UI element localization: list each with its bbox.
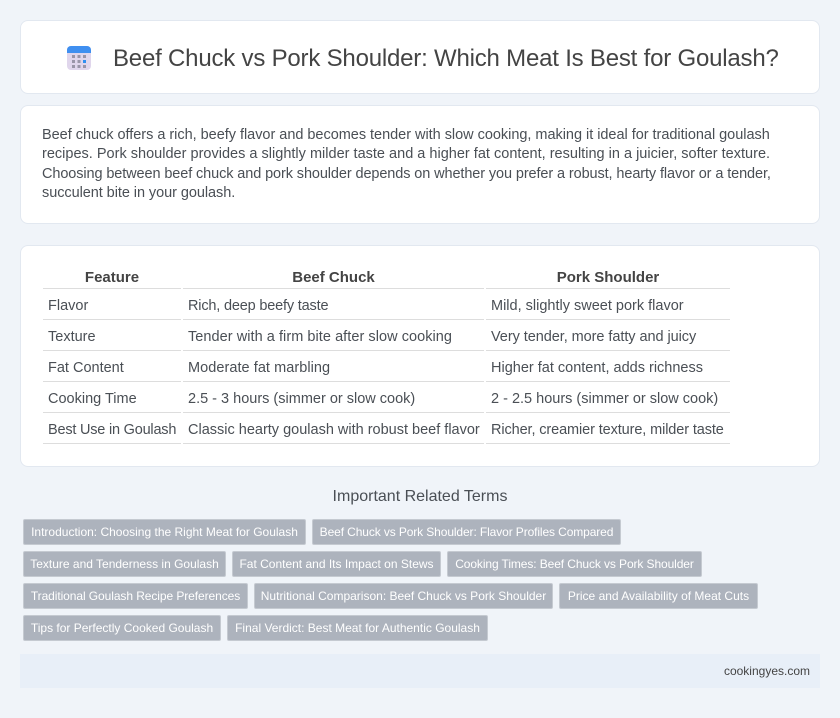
row: flavor: Mild, slightly sweet pork flavor (491, 298, 684, 314)
table header (85, 269, 659, 286)
related term tags: Introduction: Choosing the Right Meat for Goulash (31, 525, 298, 539)
row: cooking time (48, 391, 718, 407)
related term tags: Cooking Times: Beef Chuck vs Pork Shoulder (455, 557, 694, 571)
row: flavor: Flavor (48, 298, 88, 314)
row: cooking time: 2.5 - 3 hours (simmer or slow cook) (188, 391, 415, 407)
related term tags: Tips for Perfectly Cooked Goulash (31, 621, 213, 635)
heading: related terms: Important Related Terms (333, 488, 507, 505)
row: fat content: Fat Content (48, 360, 124, 376)
row: best use in goulash: Best Use in Goulash (48, 422, 176, 438)
intro card (20, 105, 820, 224)
related term tags: Traditional Goulash Recipe Preferences (31, 589, 240, 603)
icon: calendar (67, 46, 91, 70)
related term tags: Texture and Tenderness in Goulash (30, 557, 219, 571)
row: fat content (48, 360, 703, 376)
row: texture: Texture (48, 329, 96, 345)
comparison table card (20, 245, 820, 467)
title text: Beef Chuck vs Pork Shoulder: Which Meat Is Best for Goulash? (113, 45, 779, 72)
row: cooking time: Cooking Time (48, 391, 137, 407)
table header: Pork Shoulder (557, 269, 659, 286)
intro paragraph: recipes. Pork shoulder provides a slightly milder taste and a higher fat content, resulting in a juicier, softer texture. (42, 146, 770, 162)
row: best use in goulash: Classic hearty goulash with robust beef flavor (188, 422, 480, 438)
row: flavor: Rich, deep beefy taste (188, 298, 328, 314)
row: best use in goulash (48, 422, 724, 438)
intro paragraph: Choosing between beef chuck and pork shoulder depends on whether you prefer a robust, hearty flavor or a tender, (42, 166, 771, 182)
row: flavor (48, 298, 684, 314)
related term tags: Price and Availability of Meat Cuts (568, 589, 749, 603)
row: texture: Very tender, more fatty and juicy (491, 329, 696, 345)
table header: Beef Chuck (292, 269, 375, 286)
intro paragraph: succulent bite in your goulash. (42, 185, 235, 201)
row: cooking time: 2 - 2.5 hours (simmer or slow cook) (491, 391, 718, 407)
title card (20, 20, 820, 94)
row: fat content: Moderate fat marbling (188, 360, 330, 376)
related term tags: Final Verdict: Best Meat for Authentic Goulash (235, 621, 480, 635)
footer site name: cookingyes.com (724, 664, 810, 678)
related term tags (23, 519, 758, 641)
row: texture: Tender with a firm bite after slow cooking (188, 329, 452, 345)
row: best use in goulash: Richer, creamier texture, milder taste (491, 422, 724, 438)
row: fat content: Higher fat content, adds richness (491, 360, 703, 376)
table header: Feature (85, 269, 139, 286)
footer bar (20, 654, 820, 688)
related term tags: Nutritional Comparison: Beef Chuck vs Pork Shoulder (261, 589, 546, 603)
intro paragraph: Beef chuck offers a rich, beefy flavor and becomes tender with slow cooking, making it ideal for traditional goulash (42, 127, 770, 143)
related term tags: Beef Chuck vs Pork Shoulder: Flavor Profiles Compared (320, 525, 613, 539)
related term tags: Fat Content and Its Impact on Stews (239, 557, 434, 571)
intro paragraph (42, 127, 771, 201)
row: texture (48, 329, 696, 345)
